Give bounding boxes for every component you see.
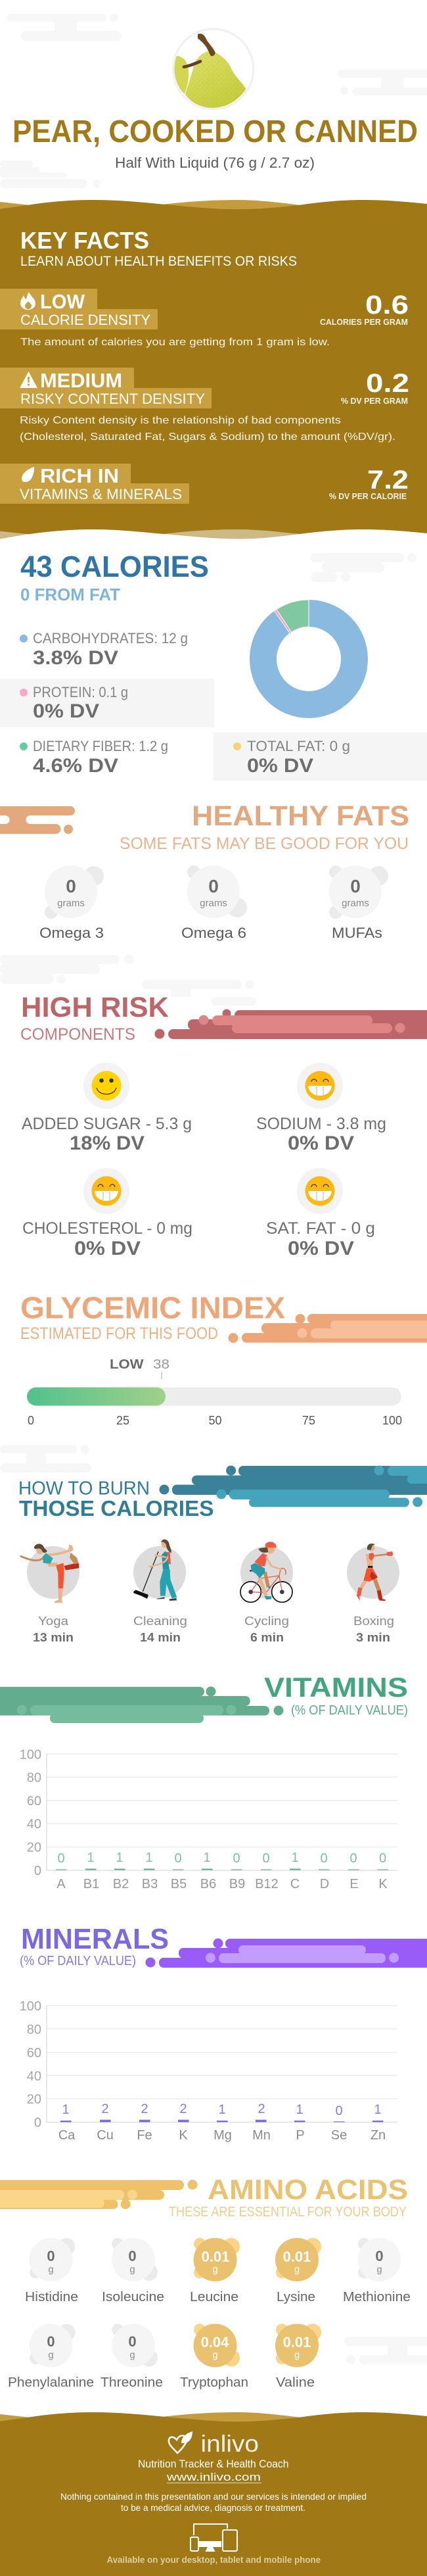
amino: leucine: g xyxy=(212,2264,218,2275)
fat: mufas xyxy=(329,865,388,941)
bar chart: vitamins: D xyxy=(320,1877,329,1891)
legend: protein: PROTEIN: 0.1 g xyxy=(33,684,128,700)
heading: those calories: THOSE CALORIES xyxy=(19,1496,214,1520)
amino: tryptophan xyxy=(180,2324,248,2390)
exercise: boxing xyxy=(347,1543,399,1644)
decoration: healthy fats streak xyxy=(0,806,75,834)
description: (Cholesterol, Saturated Fat, Sugars & Sodium) to the amount (%DV/gr). xyxy=(20,431,395,443)
bar chart: vitamins: 20 xyxy=(27,1840,41,1855)
glycemic index gauge: 75 xyxy=(302,1414,315,1427)
bar chart: minerals: Zn xyxy=(371,2128,386,2143)
risk: sodium xyxy=(256,1063,386,1154)
legend: total fat: 0% DV xyxy=(247,755,313,777)
amino: tryptophan: 0.04 xyxy=(201,2334,229,2350)
subheading: LEARN ABOUT HEALTH BENEFITS OR RISKS xyxy=(20,254,297,269)
legend: protein: 0% DV xyxy=(33,700,99,722)
logo: inlivo heart xyxy=(169,2431,192,2453)
subheading: components: COMPONENTS xyxy=(20,1025,135,1044)
amino: threonine: Threonine xyxy=(101,2375,163,2390)
fat: omega 6: grams xyxy=(200,898,227,909)
exercise: yoga: 13 min xyxy=(33,1631,74,1644)
bar chart: minerals: 0 xyxy=(335,2104,343,2118)
bar chart: vitamins: B12 xyxy=(255,1877,279,1891)
decoration: vitamins streak xyxy=(0,1686,284,1723)
legend: dietary fiber xyxy=(20,738,168,777)
risk: cholesterol xyxy=(22,1168,192,1259)
exercise: cleaning: Cleaning xyxy=(133,1615,187,1628)
exercise: yoga xyxy=(21,1544,79,1644)
icon: pear photo xyxy=(173,29,254,109)
heading: high risk: HIGH RISK xyxy=(21,992,169,1023)
fat: mufas: grams xyxy=(342,898,369,909)
bar chart: minerals: 2 xyxy=(258,2102,265,2116)
fat: omega 3: grams xyxy=(57,898,85,909)
decoration: burn streak xyxy=(159,1465,427,1507)
amino: methionine xyxy=(343,2238,411,2304)
amino: isoleucine xyxy=(102,2238,164,2304)
label: low: LOW xyxy=(40,290,85,313)
bar chart: minerals: 60 xyxy=(27,2046,41,2060)
amino: threonine: 0 xyxy=(128,2333,137,2350)
decoration: amino acids streak xyxy=(0,2179,197,2209)
bar chart: vitamins: 0 xyxy=(379,1851,386,1866)
label: calorie density: CALORIE DENSITY xyxy=(20,312,150,328)
subheading: from fat: 0 FROM FAT xyxy=(20,585,120,604)
subheading: (% OF DAILY VALUE) xyxy=(291,1703,408,1718)
bar chart: minerals: 0 xyxy=(34,2116,41,2130)
bar chart: minerals: 2 xyxy=(101,2102,109,2116)
amino: tryptophan: g xyxy=(212,2349,218,2361)
disclaimer: Nothing contained in this presentation and our services is intended or implied xyxy=(60,2491,367,2502)
legend: carbohydrates xyxy=(20,630,188,669)
bar chart: vitamins xyxy=(20,1748,397,1891)
legend: protein xyxy=(0,679,214,727)
decoration: minerals streak xyxy=(146,1939,427,1968)
risk: cholesterol: 0% DV xyxy=(74,1238,141,1259)
amino: phenylalanine: g xyxy=(48,2349,54,2361)
bar chart: minerals: 40 xyxy=(27,2069,41,2083)
amino: lysine xyxy=(275,2238,321,2304)
risk: saturated fat: 0% DV xyxy=(288,1238,354,1259)
bar chart: vitamins: 1 xyxy=(203,1851,211,1865)
bar chart: minerals: Mn xyxy=(252,2128,271,2143)
amino: threonine: g xyxy=(129,2349,135,2361)
subheading: SOME FATS MAY BE GOOD FOR YOU xyxy=(120,835,409,853)
fact: medium risky content xyxy=(0,368,409,443)
bar chart: vitamins: B5 xyxy=(171,1877,187,1891)
glycemic index gauge: 25 xyxy=(116,1414,129,1427)
glycemic index gauge: 100 xyxy=(382,1414,402,1427)
amino: valine: g xyxy=(294,2349,300,2361)
risk: saturated fat: SAT. FAT - 0 g xyxy=(266,1219,375,1238)
exercise: cleaning xyxy=(133,1540,187,1644)
amino: lysine: 0.01 xyxy=(283,2248,311,2265)
exercise: yoga: Yoga xyxy=(38,1615,69,1628)
heading: key facts: KEY FACTS xyxy=(20,227,149,254)
bar chart: minerals: Mg xyxy=(214,2128,232,2143)
icon: yoga figure xyxy=(21,1544,79,1603)
amino: leucine: Leucine xyxy=(190,2290,238,2304)
icon: flame xyxy=(20,292,35,310)
bar chart: minerals xyxy=(20,1999,397,2143)
heading: vitamins: VITAMINS xyxy=(264,1672,408,1703)
unit: % DV PER GRAM xyxy=(341,397,408,406)
fat: omega 3: 0 xyxy=(66,876,76,896)
risk: cholesterol: CHOLESTEROL - 0 mg xyxy=(22,1219,192,1238)
bar chart: vitamins: 0 xyxy=(34,1864,41,1878)
legend: carbohydrates: 3.8% DV xyxy=(33,647,118,669)
panel: footer xyxy=(0,2412,427,2576)
legend: carbohydrates: CARBOHYDRATES: 12 g xyxy=(33,630,188,646)
bar chart: vitamins: 60 xyxy=(27,1794,41,1809)
heading: minerals: MINERALS xyxy=(21,1923,169,1955)
exercise: cycling: 6 min xyxy=(250,1631,284,1644)
amino: histidine: g xyxy=(48,2264,54,2275)
bar chart: minerals: K xyxy=(179,2128,188,2143)
amino: methionine: 0 xyxy=(375,2248,384,2264)
availability note: Available on your desktop, tablet and mobile phone xyxy=(106,2555,321,2565)
fat: mufas: 0 xyxy=(350,876,361,896)
glycemic index gauge: 38 xyxy=(153,1357,169,1372)
bar chart: vitamins: 80 xyxy=(27,1770,41,1785)
subheading: ESTIMATED FOR THIS FOOD xyxy=(20,1324,218,1343)
bar chart: minerals: 20 xyxy=(27,2093,41,2107)
amino: isoleucine: Isoleucine xyxy=(102,2290,164,2304)
icon: cleaning figure xyxy=(133,1540,186,1601)
icon: grin face xyxy=(83,1168,129,1214)
risk: saturated fat xyxy=(266,1168,375,1259)
amino: methionine: Methionine xyxy=(343,2290,411,2304)
risk: sodium: 0% DV xyxy=(288,1132,354,1154)
serving subtitle: Half With Liquid (76 g / 2.7 oz) xyxy=(115,155,315,171)
amino: isoleucine: 0 xyxy=(128,2248,137,2264)
bar chart: vitamins: B3 xyxy=(142,1877,158,1891)
heading: glycemic index: GLYCEMIC INDEX xyxy=(20,1290,285,1324)
icon: warning triangle xyxy=(20,372,37,388)
amino: lysine: g xyxy=(294,2264,300,2275)
fat: omega 6: 0 xyxy=(208,876,219,896)
legend: dietary fiber: 4.6% DV xyxy=(33,755,118,777)
risk: added sugar: ADDED SUGAR - 5.3 g xyxy=(22,1115,192,1133)
donut chart xyxy=(263,600,355,705)
icon: grin face xyxy=(297,1168,343,1214)
disclaimer: to be a medical advice, diagnosis or treatment. xyxy=(121,2502,305,2513)
panel: key facts xyxy=(0,200,427,539)
heading: amino acids: AMINO ACIDS xyxy=(208,2174,408,2206)
bar chart: minerals: Cu xyxy=(97,2128,114,2143)
exercise: boxing: Boxing xyxy=(353,1615,394,1628)
bar chart: minerals: 2 xyxy=(141,2102,148,2116)
bar chart: vitamins: C xyxy=(290,1877,300,1891)
amino: leucine xyxy=(190,2238,240,2304)
bar chart: minerals: 1 xyxy=(374,2102,382,2117)
amino: isoleucine: g xyxy=(129,2264,135,2275)
bar chart: vitamins: 1 xyxy=(87,1851,95,1865)
decoration: glycemic streak xyxy=(229,1314,427,1343)
icon: grin face xyxy=(297,1063,343,1109)
bar chart: minerals: 1 xyxy=(62,2102,70,2117)
legend: total fat: TOTAL FAT: 0 g xyxy=(247,738,350,754)
decoration: high risk streak xyxy=(155,1009,427,1039)
bar chart: vitamins: A xyxy=(56,1877,66,1891)
risk: added sugar: 18% DV xyxy=(70,1132,145,1154)
description: Risky Content density is the relationship of bad components xyxy=(20,415,341,426)
description: The amount of calories you are getting from 1 gram is low. xyxy=(20,337,330,348)
glycemic index gauge: LOW xyxy=(110,1357,144,1372)
bar chart: minerals: 1 xyxy=(296,2102,303,2117)
fact: low calorie density xyxy=(0,289,409,348)
amino: methionine: g xyxy=(376,2264,382,2275)
disclaimer xyxy=(60,2491,367,2513)
amino: threonine xyxy=(101,2324,163,2390)
tagline: Nutrition Tracker & Health Coach xyxy=(138,2458,289,2470)
fat: omega 6 xyxy=(181,865,247,941)
bar chart: minerals: 100 xyxy=(20,1999,41,2014)
amino: valine: 0.01 xyxy=(283,2334,311,2350)
fat: mufas: MUFAs xyxy=(332,925,382,941)
bar chart: vitamins: 0 xyxy=(349,1851,357,1866)
amino: valine xyxy=(275,2324,321,2390)
bar chart: minerals: 2 xyxy=(179,2102,187,2116)
bar chart: vitamins: K xyxy=(378,1877,388,1891)
bar chart: minerals: 1 xyxy=(218,2102,226,2117)
bar chart: vitamins: 0 xyxy=(174,1851,182,1866)
icon: leaf xyxy=(22,467,34,482)
logo wordmark: inlivo xyxy=(201,2430,259,2457)
bar chart: vitamins: 0 xyxy=(262,1851,270,1866)
exercise: cleaning: 14 min xyxy=(140,1631,181,1644)
label: risky content density: RISKY CONTENT DENSITY xyxy=(20,391,205,407)
bar chart: vitamins: 1 xyxy=(291,1851,299,1865)
exercise: cycling: Cycling xyxy=(244,1615,289,1628)
fat: omega 6: Omega 6 xyxy=(181,925,246,941)
bar chart: vitamins: 1 xyxy=(116,1851,124,1865)
exercise: boxing: 3 min xyxy=(356,1631,390,1644)
amino: histidine xyxy=(25,2238,78,2304)
fact: rich in vitamins and minerals xyxy=(0,464,409,504)
subheading: (% OF DAILY VALUE) xyxy=(20,1954,136,1968)
icon: smile face xyxy=(83,1063,129,1109)
bar chart: vitamins: B1 xyxy=(83,1877,99,1891)
bar chart: vitamins: B2 xyxy=(113,1877,129,1891)
bar chart: vitamins: 100 xyxy=(20,1748,41,1762)
fat: omega 3 xyxy=(39,865,104,941)
legend: total fat xyxy=(214,733,427,781)
amino: phenylalanine: 0 xyxy=(47,2333,55,2350)
icon: boxing figure xyxy=(347,1543,399,1601)
heading: healthy fats: HEALTHY FATS xyxy=(192,800,409,832)
amino: lysine: Lysine xyxy=(277,2290,315,2304)
risk: added sugar xyxy=(22,1063,192,1154)
amino: phenylalanine: Phenylalanine xyxy=(8,2375,94,2390)
unit: % DV PER CALORIE xyxy=(329,492,407,501)
glycemic index gauge: 50 xyxy=(208,1414,222,1427)
bar chart: minerals: Se xyxy=(331,2128,347,2143)
label: medium: MEDIUM xyxy=(40,369,122,392)
amino: histidine: Histidine xyxy=(25,2290,78,2304)
fat: omega 3: Omega 3 xyxy=(39,925,104,941)
bar chart: vitamins: B6 xyxy=(200,1877,216,1891)
amino: tryptophan: Tryptophan xyxy=(180,2375,248,2390)
glycemic index gauge xyxy=(27,1357,402,1427)
description xyxy=(20,415,395,443)
value 0.6: 0.6 xyxy=(365,291,409,320)
label: rich in: RICH IN xyxy=(40,464,119,487)
icon: devices xyxy=(191,2524,237,2551)
icon: cycling figure xyxy=(240,1542,293,1602)
bar chart: vitamins: 40 xyxy=(27,1817,41,1832)
risk: sodium: SODIUM - 3.8 mg xyxy=(256,1115,386,1133)
amino: valine: Valine xyxy=(276,2375,315,2390)
bar chart: minerals: 80 xyxy=(27,2023,41,2037)
bar chart: vitamins: E xyxy=(349,1877,359,1891)
value 7.2: 7.2 xyxy=(367,466,409,495)
heading: calories: 43 CALORIES xyxy=(20,550,209,583)
glycemic index gauge: 0 xyxy=(28,1414,34,1427)
bar chart: vitamins: 0 xyxy=(57,1851,65,1866)
amino: phenylalanine xyxy=(8,2324,94,2390)
legend: dietary fiber: DIETARY FIBER: 1.2 g xyxy=(33,738,168,754)
bar chart: vitamins: 1 xyxy=(145,1851,153,1865)
bar chart: vitamins: B9 xyxy=(229,1877,245,1891)
bar chart: vitamins: 0 xyxy=(320,1851,328,1866)
exercise: cycling xyxy=(240,1542,293,1644)
value 0.2: 0.2 xyxy=(366,369,409,398)
amino: histidine: 0 xyxy=(47,2248,55,2264)
label: vitamins and minerals: VITAMINS & MINERALS xyxy=(20,486,182,502)
bar chart: vitamins: 0 xyxy=(233,1851,240,1866)
bar chart: minerals: P xyxy=(296,2128,305,2143)
bar chart: minerals: Fe xyxy=(137,2128,152,2143)
bar chart: minerals: Ca xyxy=(58,2128,76,2143)
website: www.inlivo.com xyxy=(166,2471,261,2483)
unit: CALORIES PER GRAM xyxy=(320,318,408,327)
amino: leucine: 0.01 xyxy=(202,2248,229,2265)
heading: how to burn: HOW TO BURN xyxy=(18,1478,150,1499)
